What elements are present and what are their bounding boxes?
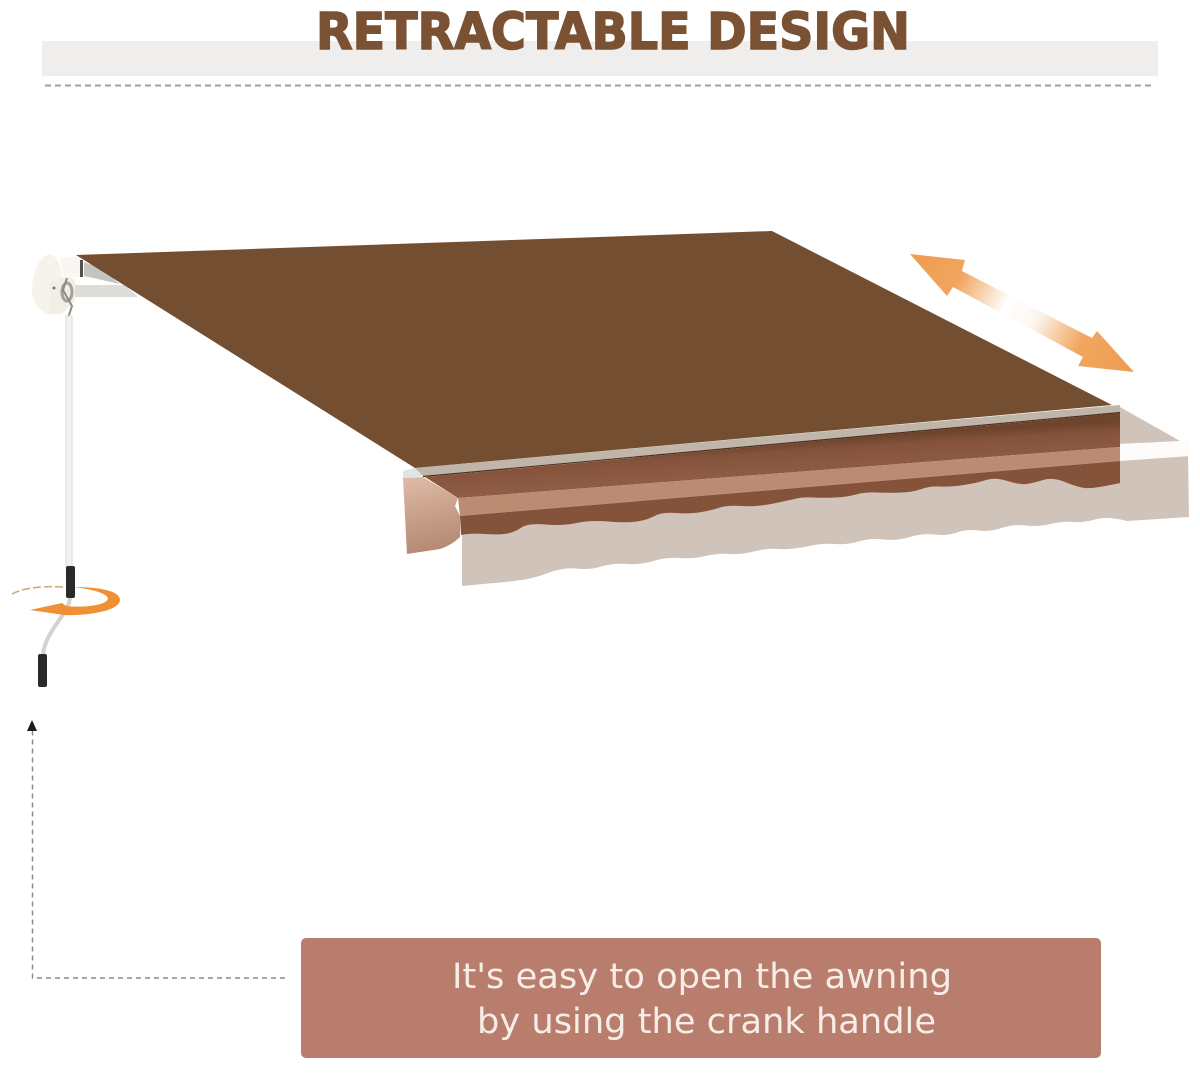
valance upper fabric (425, 413, 1120, 498)
double-headed extension arrow (910, 254, 1134, 372)
rotation arrow (30, 587, 120, 615)
callout text: It's easy to open the awning (452, 957, 952, 997)
ghost white roller band (1120, 441, 1190, 461)
valance scalloped lower fabric (460, 461, 1120, 535)
wall bracket and support arm (32, 254, 138, 318)
ghost extended valance (462, 456, 1189, 586)
crank rod (43, 598, 70, 654)
upper grip (66, 566, 75, 598)
crank handle (12, 316, 120, 687)
crank pole (66, 316, 72, 568)
front bar (403, 405, 1120, 478)
awning illustration (32, 231, 1190, 586)
valance lighter strip (458, 447, 1120, 516)
ghost extended side panel (1120, 407, 1180, 444)
callout text: by using the crank handle (477, 1002, 936, 1042)
valance side panel (403, 477, 460, 554)
lower grip (38, 654, 47, 687)
dashed divider line (45, 84, 1155, 86)
callout box (301, 938, 1101, 1058)
callout text (452, 957, 952, 1042)
dashed connector arrow (27, 720, 285, 978)
crank rotation arrow back dashes (12, 587, 64, 594)
title band (42, 41, 1158, 76)
title: RETRACTABLE DESIGN (316, 3, 910, 62)
canopy fabric (76, 231, 1112, 468)
